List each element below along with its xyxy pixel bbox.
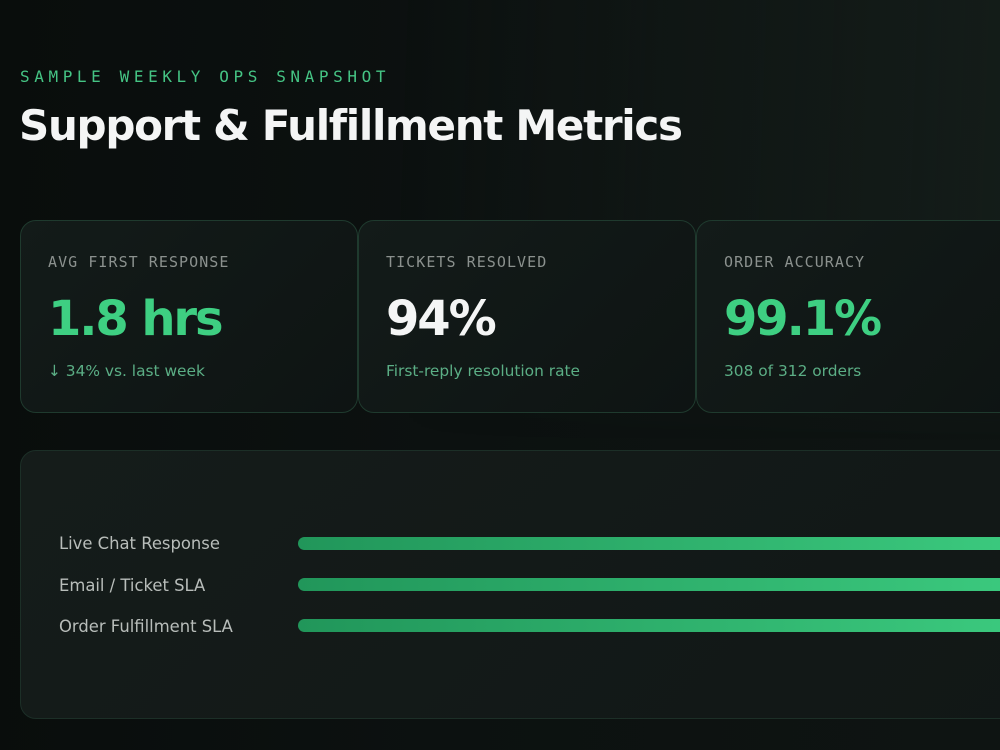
panel: order accuracy (696, 220, 1000, 413)
label: ORDER ACCURACY (724, 253, 865, 271)
label: AVG FIRST RESPONSE (48, 253, 229, 271)
note: 308 of 312 orders (724, 362, 861, 380)
note: First-reply resolution rate (386, 362, 580, 380)
label: TICKETS RESOLVED (386, 253, 547, 271)
label: live chat: Live Chat Response (59, 534, 220, 553)
panel: SLA bars (20, 450, 1000, 719)
title: Support & Fulfillment Metrics (19, 101, 682, 150)
value: 94% (386, 291, 495, 347)
value: 1.8 hrs (48, 291, 221, 347)
value: 99.1% (724, 291, 880, 347)
bar: email (298, 578, 1000, 591)
label: email: Email / Ticket SLA (59, 576, 205, 595)
panel: tickets resolved (358, 220, 696, 413)
label: order fulfillment: Order Fulfillment SLA (59, 617, 233, 636)
note: ↓ 34% vs. last week (48, 362, 205, 380)
panel: average first response (20, 220, 358, 413)
eyebrow: SAMPLE WEEKLY OPS SNAPSHOT (20, 67, 390, 86)
bar: live chat (298, 537, 1000, 550)
bar: order fulfillment (298, 619, 1000, 632)
